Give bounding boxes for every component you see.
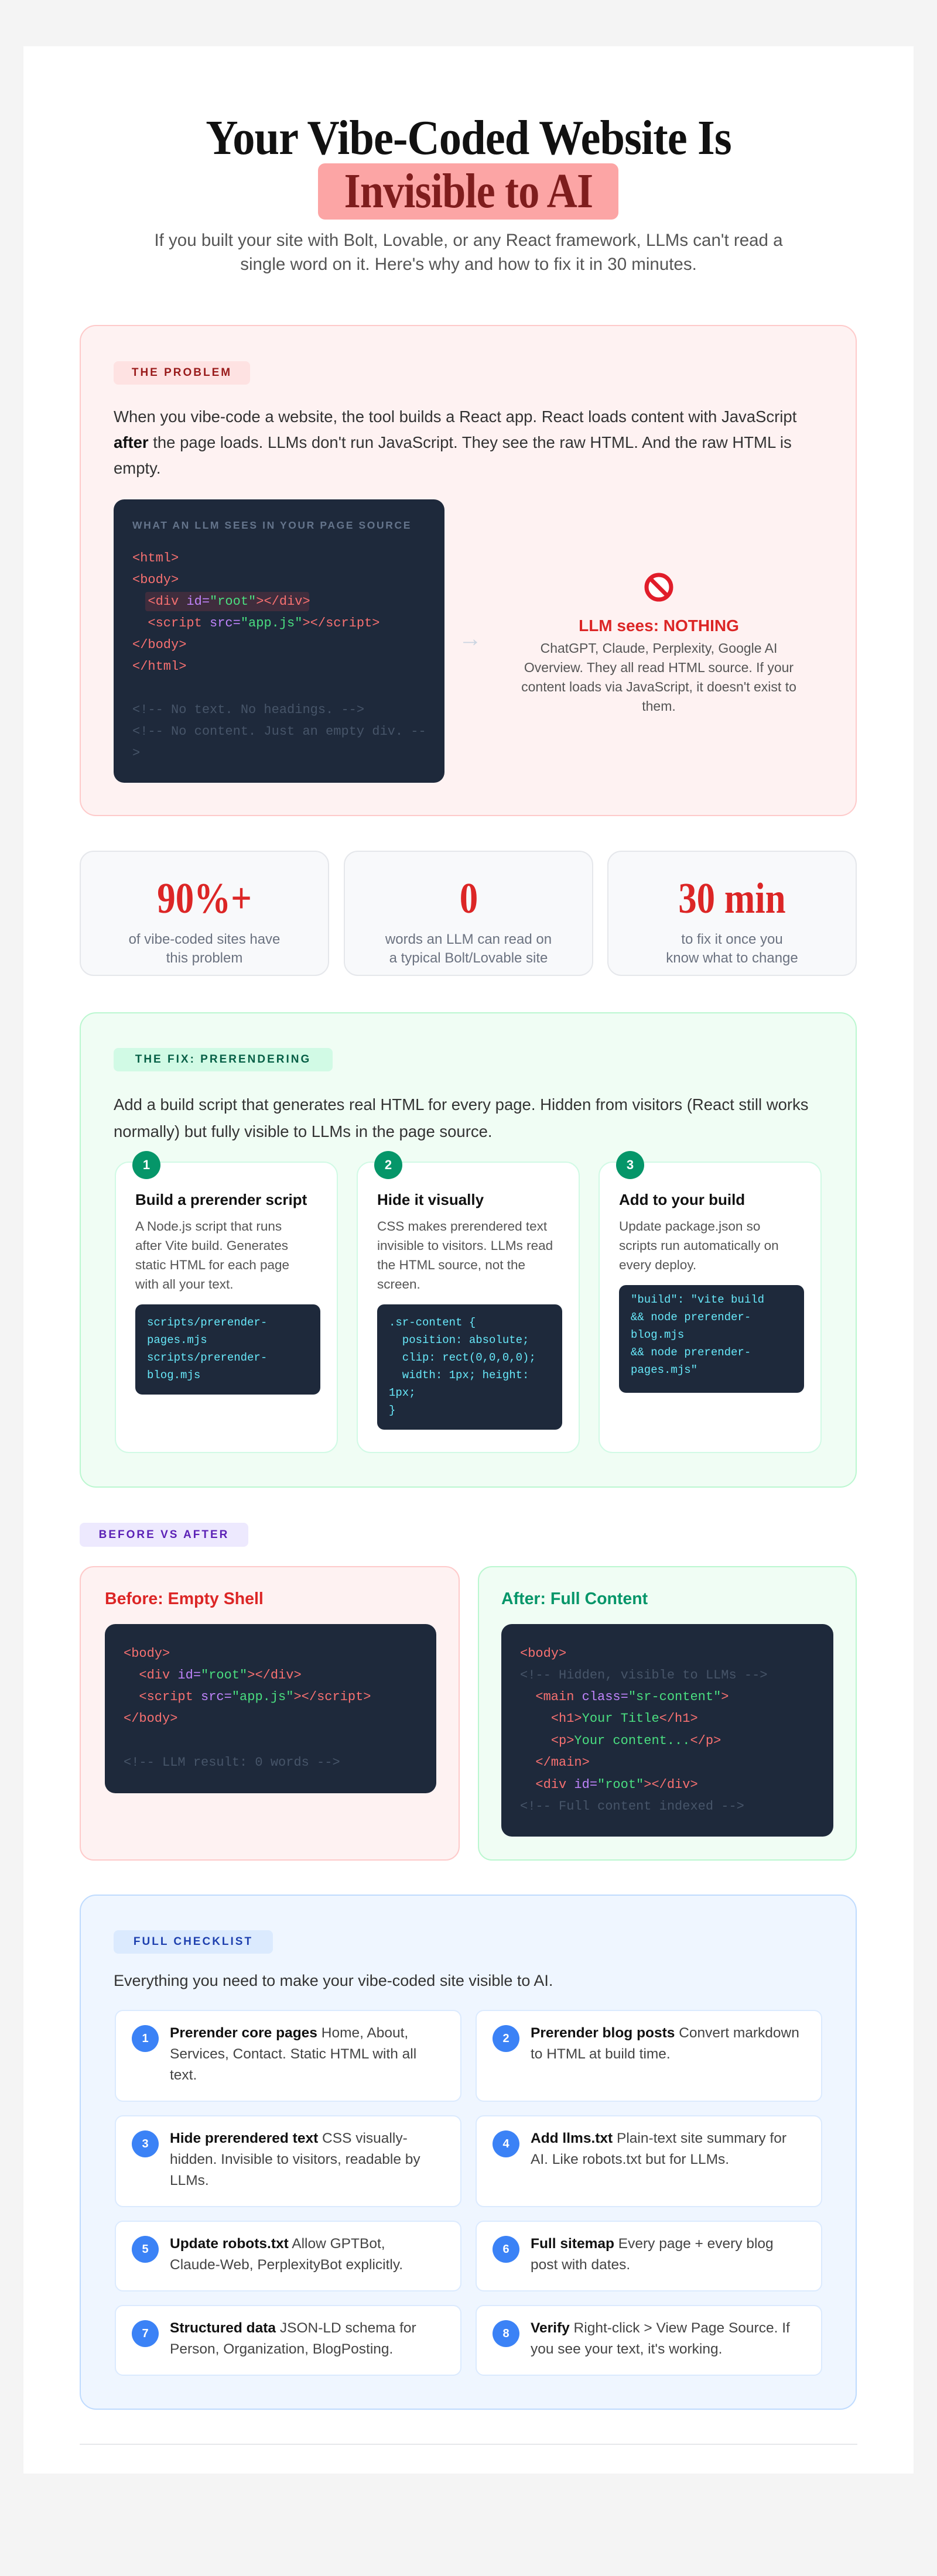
tag: the fix bbox=[114, 1048, 333, 1071]
step 1: after Vite build. Generates bbox=[135, 1238, 288, 1253]
heading: after: After: Full Content bbox=[501, 1590, 648, 1608]
step 2 bbox=[357, 1162, 580, 1453]
stat: 30 min: to fix it once you bbox=[681, 931, 783, 947]
code: after: <div id="root"></div> bbox=[535, 1777, 698, 1792]
item 1: 1 bbox=[142, 2032, 149, 2044]
code: after: <main class="sr-content"> bbox=[535, 1690, 729, 1704]
item 3: 3 bbox=[142, 2137, 149, 2150]
icon: prohibited bbox=[644, 573, 673, 602]
tag: full checklist bbox=[114, 1930, 273, 1954]
subtitle: If you built your site with Bolt, Lovable, or any React framework, LLMs can't read a bbox=[154, 231, 783, 250]
stat: 0 bbox=[344, 851, 593, 976]
item 2 bbox=[476, 2010, 822, 2102]
item 5: Claude-Web, PerplexityBot explicitly. bbox=[170, 2257, 403, 2273]
code block: LLM page source bbox=[114, 499, 444, 783]
step 1: static HTML for each page bbox=[135, 1258, 289, 1272]
subtitle: single word on it. Here's why and how to fix it in 30 minutes. bbox=[240, 255, 697, 274]
panel: before bbox=[80, 1566, 460, 1861]
LLM sees nothing callout bbox=[521, 616, 796, 714]
item 2: 2 bbox=[502, 2032, 509, 2044]
stat: 30 min: 30 min bbox=[678, 875, 786, 923]
panel: the problem bbox=[80, 325, 857, 816]
item 8: you see your text, it's working. bbox=[531, 2341, 722, 2357]
item 2: Prerender blog posts Convert markdown bbox=[531, 2025, 799, 2041]
code: before: <!-- LLM result: 0 words --> bbox=[124, 1755, 340, 1770]
title highlight: Invisible to AI: Invisible to AI bbox=[344, 164, 593, 218]
code: before: </body> bbox=[124, 1711, 177, 1726]
LLM sees nothing callout: LLM sees: NOTHING bbox=[579, 616, 739, 635]
item 1: Services, Contact. Static HTML with all bbox=[170, 2046, 416, 2062]
code block: LLM page source: <script src="app.js"></script> bbox=[148, 616, 379, 631]
item 2: to HTML at build time. bbox=[531, 2046, 671, 2062]
problem paragraph: empty. bbox=[114, 459, 160, 477]
code block: LLM page source: </html> bbox=[132, 659, 186, 674]
step 1: Build a prerender script bbox=[135, 1191, 307, 1208]
step 3: Add to your build bbox=[619, 1191, 745, 1208]
stat: 30 min bbox=[607, 851, 857, 976]
LLM sees nothing callout: them. bbox=[642, 698, 676, 714]
stat: 90%+ bbox=[80, 851, 329, 976]
checklist intro: Everything you need to make your vibe-coded site visible to AI. bbox=[114, 1972, 553, 1989]
item 6: post with dates. bbox=[531, 2257, 630, 2273]
item 7: Person, Organization, BlogPosting. bbox=[170, 2341, 393, 2357]
fix paragraph bbox=[114, 1095, 809, 1140]
code block: LLM page source: </body> bbox=[132, 638, 186, 652]
code block: LLM page source: <html> bbox=[132, 551, 179, 566]
item 3: Hide prerendered text CSS visually- bbox=[170, 2130, 408, 2146]
stat: 0: 0 bbox=[459, 875, 478, 923]
code block: LLM page source: <body> bbox=[132, 573, 179, 587]
panel: the fix bbox=[80, 1012, 857, 1488]
item 1: Prerender core pages Home, About, bbox=[170, 2025, 408, 2041]
code: before: <script src="app.js"></script> bbox=[139, 1690, 371, 1704]
step 1 bbox=[115, 1162, 338, 1453]
item 1: text. bbox=[170, 2067, 197, 2083]
problem paragraph: When you vibe-code a website, the tool builds a React app. React loads content with JavaScript bbox=[114, 407, 796, 426]
step 1: scripts/prerender- pages.mjs scripts/prerender- blog.mjs bbox=[147, 1316, 267, 1382]
panel: after bbox=[478, 1566, 857, 1861]
code: after bbox=[501, 1624, 833, 1837]
code block: LLM page source: > bbox=[132, 746, 140, 761]
step 3 bbox=[599, 1162, 822, 1453]
subtitle bbox=[154, 231, 783, 274]
code block: LLM page source: WHAT AN LLM SEES IN YOUR PAGE SOURCE bbox=[132, 519, 412, 531]
item 5: 5 bbox=[142, 2242, 149, 2255]
item 4 bbox=[476, 2115, 822, 2207]
title: Your Vibe-Coded Website Is bbox=[206, 111, 731, 165]
tag: the fix: THE FIX: PRERENDERING bbox=[135, 1053, 311, 1066]
item 8: Verify Right-click > View Page Source. If bbox=[531, 2320, 790, 2336]
item 4: Add llms.txt Plain-text site summary for bbox=[531, 2130, 786, 2146]
code: after: </main> bbox=[535, 1755, 590, 1770]
problem paragraph: after the page loads. LLMs don't run JavaScript. They see the raw HTML. And the raw HTML is bbox=[114, 433, 792, 451]
code: before: <body> bbox=[124, 1646, 170, 1661]
code: before bbox=[105, 1624, 436, 1793]
tag: the problem bbox=[114, 361, 250, 385]
stat: 90%+: 90%+ bbox=[157, 875, 252, 923]
tag: full checklist: FULL CHECKLIST bbox=[134, 1936, 253, 1948]
LLM sees nothing callout: content loads via JavaScript, it doesn't exist to bbox=[521, 679, 796, 694]
arrow: → bbox=[459, 626, 482, 652]
step 2: 2 bbox=[385, 1157, 392, 1172]
item 4: AI. Like robots.txt but for LLMs. bbox=[531, 2152, 729, 2167]
code: after: <!-- Full content indexed --> bbox=[520, 1799, 744, 1814]
stat: 0: a typical Bolt/Lovable site bbox=[389, 950, 548, 966]
step 1: 1 bbox=[143, 1157, 150, 1172]
heading: before: Before: Empty Shell bbox=[105, 1590, 264, 1608]
code block: LLM page source: <!-- No text. No headings. --> bbox=[132, 703, 364, 717]
stat: 0: words an LLM can read on bbox=[385, 931, 552, 947]
step 1: A Node.js script that runs bbox=[135, 1219, 282, 1234]
step 3: Update package.json so bbox=[619, 1219, 760, 1234]
code: after: <h1>Your Title</h1> bbox=[551, 1711, 698, 1726]
tag: before vs after: BEFORE VS AFTER bbox=[99, 1528, 229, 1541]
fix paragraph: normally) but fully visible to LLMs in the page source. bbox=[114, 1122, 493, 1140]
step 3: "build": "vite build && node prerender- blog.mjs && node prerender- pages.mjs" bbox=[631, 1293, 764, 1376]
item 7 bbox=[115, 2305, 461, 2376]
step 2: CSS makes prerendered text bbox=[377, 1219, 547, 1234]
item 6: Full sitemap Every page + every blog bbox=[531, 2236, 774, 2252]
code block: LLM page source: <div id="root"></div> bbox=[148, 594, 310, 609]
item 8 bbox=[476, 2305, 822, 2376]
code: after: <body> bbox=[520, 1646, 566, 1661]
step 3: 3 bbox=[627, 1157, 634, 1172]
stat: 90%+: this problem bbox=[166, 950, 242, 966]
LLM sees nothing callout: ChatGPT, Claude, Perplexity, Google AI bbox=[541, 640, 777, 656]
tag: before vs after bbox=[80, 1523, 248, 1547]
problem paragraph bbox=[114, 407, 796, 477]
item 7: 7 bbox=[142, 2327, 149, 2339]
panel: full checklist bbox=[80, 1895, 857, 2410]
item 3 bbox=[115, 2115, 461, 2207]
item 3: hidden. Invisible to visitors, readable by bbox=[170, 2152, 420, 2167]
step 3: scripts run automatically on bbox=[619, 1238, 779, 1253]
step 2: invisible to visitors. LLMs read bbox=[377, 1238, 553, 1253]
step 1: with all your text. bbox=[135, 1277, 234, 1292]
item 6 bbox=[476, 2221, 822, 2291]
step 2: screen. bbox=[377, 1277, 420, 1292]
step 3: every deploy. bbox=[619, 1258, 696, 1272]
step 2: .sr-content { position: absolute; clip: rect(0,0,0,0); width: 1px; height: 1px; } bbox=[389, 1316, 536, 1417]
LLM sees nothing callout: Overview. They all read HTML source. If your bbox=[524, 660, 794, 675]
step 2: the HTML source, not the bbox=[377, 1258, 525, 1272]
tag: the problem: THE PROBLEM bbox=[132, 366, 232, 379]
code block: LLM page source: <!-- No content. Just an empty div. -- bbox=[132, 724, 426, 739]
item 6: 6 bbox=[502, 2242, 509, 2255]
step 2: Hide it visually bbox=[377, 1191, 484, 1208]
item 5: Update robots.txt Allow GPTBot, bbox=[170, 2236, 385, 2252]
code: after: <!-- Hidden, visible to LLMs --> bbox=[520, 1668, 767, 1683]
fix paragraph: Add a build script that generates real HTML for every page. Hidden from visitors (React still works bbox=[114, 1095, 809, 1114]
stat: 90%+: of vibe-coded sites have bbox=[129, 931, 280, 947]
stat: 30 min: know what to change bbox=[666, 950, 798, 966]
code: after: <p>Your content...</p> bbox=[551, 1734, 721, 1748]
item 1 bbox=[115, 2010, 461, 2102]
item 8: 8 bbox=[502, 2327, 509, 2339]
item 5 bbox=[115, 2221, 461, 2291]
item 3: LLMs. bbox=[170, 2173, 209, 2188]
code: before: <div id="root"></div> bbox=[139, 1668, 302, 1683]
item 7: Structured data JSON-LD schema for bbox=[170, 2320, 416, 2336]
item 4: 4 bbox=[502, 2137, 509, 2150]
